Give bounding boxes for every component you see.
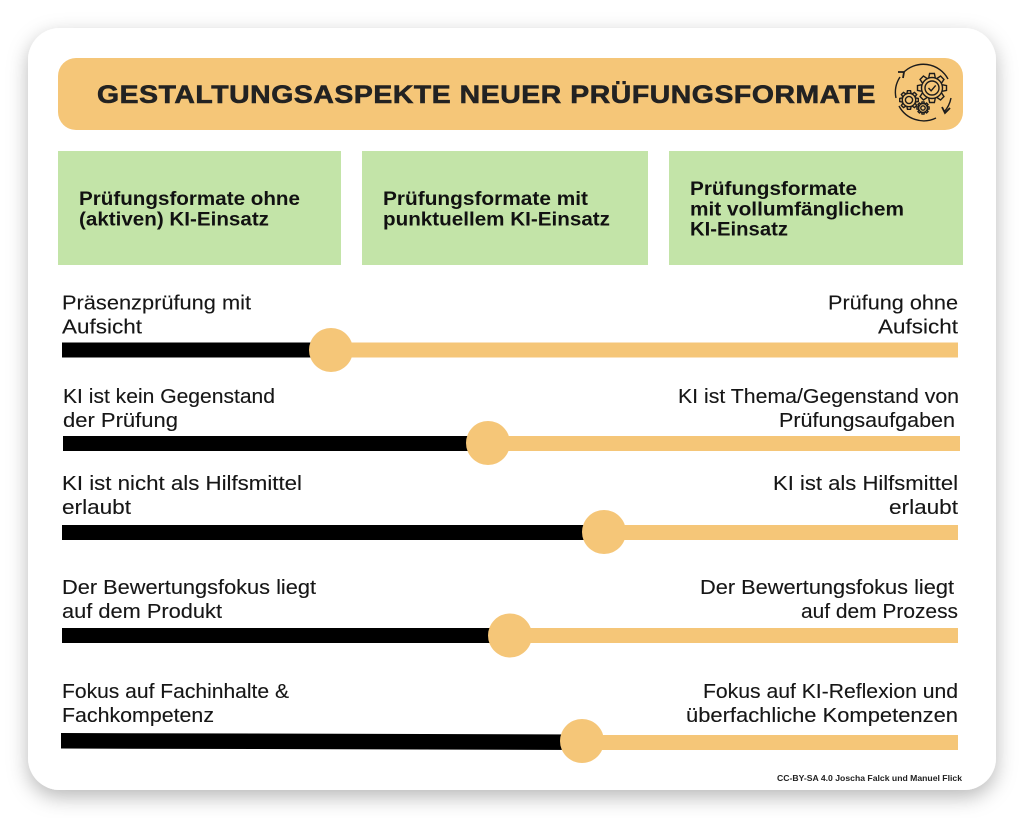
slider 3: Hilfsmittel: KI ist als Hilfsmittel (773, 473, 958, 495)
panel: category 1 (58, 151, 341, 265)
slider 5: Fokus: überfachliche Kompetenzen (686, 705, 958, 727)
slider 3: Hilfsmittel: KI ist nicht als Hilfsmittel (62, 473, 302, 495)
credit: CC-BY-SA 4.0 Joscha Falck und Manuel Flick (777, 773, 962, 783)
slider 4: Bewertungsfokus: auf dem Produkt (62, 601, 222, 623)
slider 1: Aufsicht (62, 292, 958, 372)
slider 1: Aufsicht: Aufsicht (878, 316, 958, 338)
slider 4: Bewertungsfokus: Der Bewertungsfokus liegt (62, 577, 316, 599)
panel: category 1: (aktiven) KI-Einsatz (79, 208, 269, 230)
slider 2: Gegenstand: KI ist kein Gegenstand (63, 386, 275, 408)
slider 4: Bewertungsfokus: auf dem Prozess (801, 601, 958, 623)
slider 2: Gegenstand (63, 386, 960, 465)
slider 3: Hilfsmittel: erlaubt (62, 497, 131, 519)
slider 1: Aufsicht: Prüfung ohne (828, 292, 958, 314)
panel: category 3: KI-Einsatz (690, 218, 788, 240)
slider 1: Aufsicht: Aufsicht (62, 316, 142, 338)
panel: category 2: Prüfungsformate mit (383, 188, 589, 210)
slider 1: Aufsicht: Präsenzprüfung mit (62, 292, 251, 314)
panel: category 2 (362, 151, 648, 265)
title banner (58, 58, 963, 130)
slider 3: Hilfsmittel (62, 473, 958, 554)
slider 5: Fokus: Fachkompetenz (62, 705, 214, 727)
panel: category 3: Prüfungsformate (690, 178, 857, 200)
slider 2: Gegenstand: Prüfungsaufgaben (779, 410, 955, 432)
title: GESTALTUNGSASPEKTE NEUER PRÜFUNGSFORMATE (97, 80, 876, 109)
panel: category 3 (669, 151, 963, 265)
slider 4: Bewertungsfokus (62, 577, 958, 658)
slider 4: Bewertungsfokus: Der Bewertungsfokus liegt (700, 577, 954, 599)
slider 5: Fokus: Fokus auf KI-Reflexion und (703, 681, 958, 703)
panel: category 2: punktuellem KI-Einsatz (383, 208, 610, 230)
panel: category 1: Prüfungsformate ohne (79, 188, 300, 210)
slider 5: Fokus (61, 681, 958, 763)
panel: category 3: mit vollumfänglichem (690, 198, 904, 220)
slider 2: Gegenstand: der Prüfung (63, 410, 178, 432)
slider 2: Gegenstand: KI ist Thema/Gegenstand von (678, 386, 959, 408)
slider 5: Fokus: Fokus auf Fachinhalte & (62, 681, 290, 703)
slider 3: Hilfsmittel: erlaubt (889, 497, 958, 519)
icon: gears in circular arrows (895, 64, 951, 121)
